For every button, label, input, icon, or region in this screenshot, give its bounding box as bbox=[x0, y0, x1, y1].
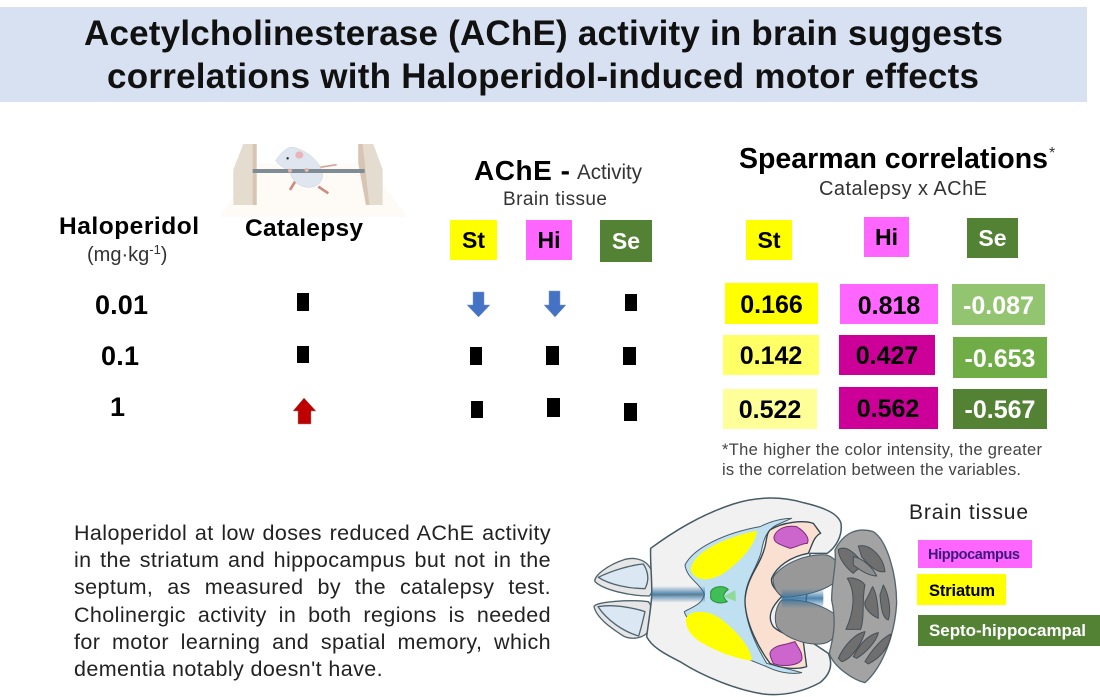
correlation table: 0.142 bbox=[740, 342, 802, 370]
heading: Haloperidol: Haloperidol bbox=[59, 213, 199, 240]
legend item: septo-hippocampal bbox=[918, 615, 1100, 646]
heading: Spearman correlations bbox=[739, 143, 1055, 200]
footnote: *The higher the color intensity, the greater bbox=[722, 441, 1042, 459]
text block: summary paragraph: septum, as measured by the catalepsy test. bbox=[74, 575, 551, 599]
AChE column tags bbox=[450, 220, 652, 262]
dose labels: 0.1 bbox=[101, 341, 139, 371]
heading: AChE activity: AChE - bbox=[474, 155, 570, 186]
peach region bbox=[745, 522, 821, 668]
dose labels bbox=[95, 290, 148, 422]
heading: Spearman correlations: Catalepsy x AChE bbox=[819, 178, 987, 200]
text block: summary paragraph: dementia notably doesn't have. bbox=[74, 657, 383, 681]
correlation table: 0.522 bbox=[739, 396, 801, 424]
Spearman column tags: Se bbox=[978, 225, 1007, 251]
heading: Catalepsy: Catalepsy bbox=[245, 215, 363, 242]
footnote: is the correlation between the variables. bbox=[722, 461, 1021, 479]
Spearman column tags: Hi bbox=[875, 224, 898, 250]
heading: Haloperidol: -1 bbox=[149, 242, 161, 257]
correlation table: 0.818 bbox=[858, 292, 920, 320]
arrow: catalepsy increased bbox=[293, 398, 316, 424]
striatum bbox=[691, 531, 757, 579]
olfactory bulbs bbox=[594, 558, 653, 638]
text block: summary paragraph bbox=[74, 521, 551, 681]
AChE column tags: Se bbox=[612, 228, 640, 254]
Spearman column tags bbox=[746, 217, 1018, 260]
brain diagram bbox=[594, 498, 897, 695]
legend item: septo-hippocampal: Septo-hippocampal bbox=[929, 621, 1086, 640]
heading: Spearman correlations: Spearman correlations bbox=[739, 143, 1048, 175]
hippocampus bbox=[774, 526, 808, 548]
midline bbox=[652, 586, 705, 603]
legend: brain tissue: Brain tissue bbox=[909, 501, 1028, 524]
heading: Haloperidol bbox=[59, 213, 199, 266]
correlation table: -0.567 bbox=[965, 396, 1035, 424]
catalepsy markers bbox=[293, 293, 316, 424]
dose labels: 1 bbox=[110, 392, 125, 422]
heading: AChE activity: Activity bbox=[577, 160, 642, 184]
text block: summary paragraph: for motor learning and spatial memory, which bbox=[74, 630, 551, 654]
heading: Spearman correlations: * bbox=[1049, 145, 1055, 162]
icon: rat on catalepsy bar bbox=[220, 144, 407, 217]
heading: AChE activity: Brain tissue bbox=[503, 189, 607, 210]
heading: AChE activity bbox=[474, 155, 642, 210]
correlation table: -0.087 bbox=[963, 292, 1034, 320]
cortex bbox=[647, 498, 841, 695]
cerebellum bbox=[829, 530, 897, 683]
correlation table bbox=[723, 283, 1047, 429]
text block: summary paragraph: Haloperidol at low doses reduced AChE activity bbox=[74, 521, 551, 545]
AChE column tags: St bbox=[462, 227, 485, 253]
colliculi bbox=[773, 555, 840, 597]
title banner: Acetylcholinesterase (AChE) activity in brain suggests bbox=[84, 14, 1003, 53]
AChE column tags: Hi bbox=[538, 227, 560, 253]
correlation table: -0.653 bbox=[965, 345, 1035, 373]
correlation table: 0.427 bbox=[856, 342, 918, 370]
heading: Haloperidol: (mg·kg bbox=[87, 244, 149, 266]
legend: brain tissue bbox=[909, 501, 1100, 646]
legend item: hippocampus: Hippocampus bbox=[928, 547, 1020, 563]
text block: summary paragraph: in the striatum and hippocampus but not in the bbox=[74, 548, 551, 572]
AChE activity markers bbox=[467, 291, 637, 421]
legend item: striatum bbox=[917, 574, 1006, 605]
Spearman column tags: St bbox=[758, 227, 781, 253]
correlation table: 0.562 bbox=[857, 395, 919, 423]
heading: Haloperidol: ) bbox=[161, 244, 167, 266]
correlation table: 0.166 bbox=[740, 291, 803, 319]
text block: summary paragraph: Cholinergic activity in both regions is needed bbox=[74, 603, 551, 627]
septum bbox=[711, 587, 728, 603]
arrow: hippocampus reduced bbox=[544, 291, 566, 317]
ventricular area bbox=[684, 518, 802, 673]
legend item: hippocampus bbox=[918, 540, 1032, 568]
dose labels: 0.01 bbox=[95, 290, 148, 320]
arrow: striatum reduced bbox=[467, 292, 490, 317]
title banner: correlations with Haloperidol-induced motor effects bbox=[107, 57, 979, 96]
legend item: striatum: Striatum bbox=[929, 582, 995, 600]
title banner bbox=[0, 7, 1087, 102]
footnote bbox=[722, 441, 1042, 479]
